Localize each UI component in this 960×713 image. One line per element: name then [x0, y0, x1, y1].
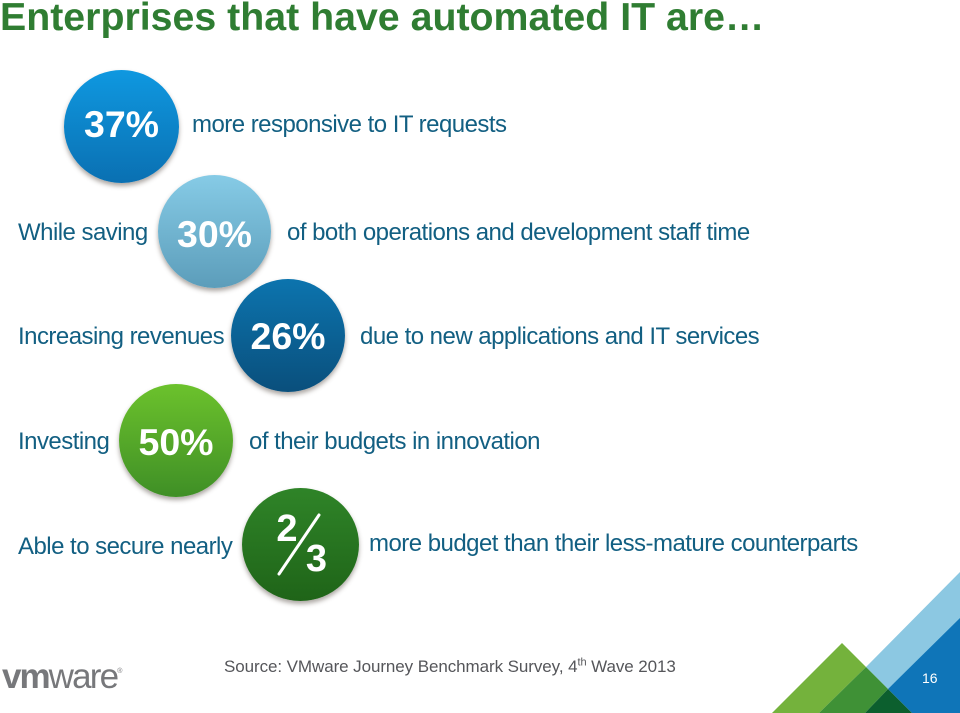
stat circle: 26%: 26%: [250, 315, 326, 357]
stat circle: 30%: 30%: [177, 213, 252, 255]
text: more responsive: more responsive to IT requests: [192, 111, 506, 138]
text: new applications: due to new applications and IT services: [360, 323, 759, 350]
text: budgets in innovation: of their budgets in innovation: [249, 428, 540, 455]
text: while saving: While saving: [18, 219, 148, 246]
text: operations and development: of both operations and development staff time: [287, 219, 750, 246]
stat circle: two thirds: [242, 488, 359, 601]
stat circle: 50%: [119, 384, 233, 497]
stat circle: 30%: [158, 175, 271, 288]
page number: 16: [922, 670, 938, 686]
logo: vmware: vmware®: [2, 657, 122, 696]
stat circle: two thirds: 3: [306, 538, 327, 580]
stat circle: 26%: [231, 279, 345, 392]
text: more budget: more budget than their less-mature counterparts: [369, 530, 858, 557]
stat circle: 37%: [64, 70, 179, 183]
stat circle: 37%: 37%: [84, 103, 159, 145]
source note: Source: VMware Journey Benchmark Survey, 4th Wave 2013: [224, 656, 676, 676]
text: investing: Investing: [18, 428, 109, 455]
stat circle: two thirds: 2: [276, 508, 298, 550]
stat circle: 50%: 50%: [138, 421, 214, 463]
text: increasing revenues: Increasing revenues: [18, 323, 224, 350]
text: able to secure: Able to secure nearly: [18, 533, 232, 560]
